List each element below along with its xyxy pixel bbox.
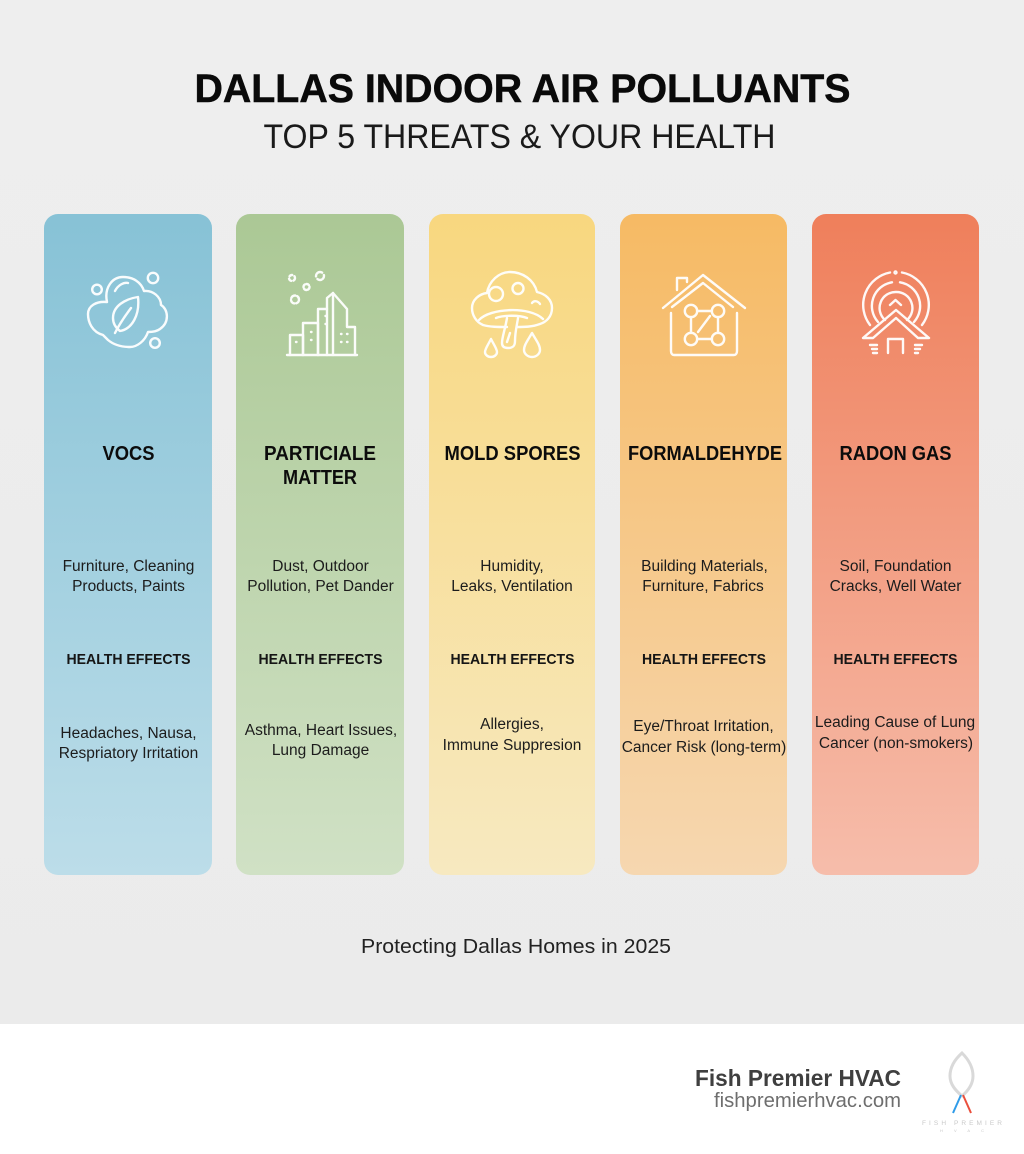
effects — [245, 722, 397, 759]
sources: Humidity, — [480, 558, 544, 575]
icon: house with molecule — [663, 275, 745, 355]
health effects label: HEALTH EFFECTS — [66, 651, 190, 668]
heading: MOLD SPORES — [444, 443, 580, 465]
panel: Radon gas — [812, 214, 979, 875]
effects — [443, 716, 581, 754]
sources: Products, Paints — [72, 578, 185, 595]
title — [194, 67, 850, 156]
logo: Fish Premier: FISH PREMIER — [922, 1120, 1002, 1127]
logo: Fish Premier — [922, 1053, 1002, 1133]
heading: FORMALDEHYDE — [628, 443, 782, 465]
subtitle: TOP 5 THREATS & YOUR HEALTH — [264, 118, 776, 156]
sources: Dust, Outdoor — [272, 558, 369, 575]
sources: Furniture, Cleaning — [63, 558, 194, 575]
heading: VOCS — [102, 443, 154, 465]
footer brand text: fishpremierhvac.com — [714, 1090, 901, 1112]
effects: Cancer (non-smokers) — [819, 735, 973, 752]
health effects label: HEALTH EFFECTS — [642, 651, 766, 668]
health effects label: HEALTH EFFECTS — [834, 651, 958, 668]
effects: Eye/Throat Irritation, — [633, 718, 774, 735]
sources — [830, 558, 961, 595]
icon: city with particles — [287, 272, 357, 355]
effects: Allergies, — [480, 716, 544, 733]
effects: Asthma, Heart Issues, — [245, 722, 397, 739]
heading: PARTICIALE — [264, 443, 376, 465]
effects: Cancer Risk (long-term) — [622, 739, 786, 756]
sources — [247, 558, 394, 595]
icon: house with radon waves — [863, 272, 929, 353]
health effects label: HEALTH EFFECTS — [450, 651, 574, 668]
title: DALLAS INDOOR AIR POLLUANTS — [194, 67, 850, 111]
sources: Furniture, Fabrics — [642, 578, 764, 595]
effects — [59, 725, 198, 762]
panel: Mold spores — [429, 214, 595, 875]
footer brand text: Fish Premier HVAC — [695, 1065, 901, 1091]
sources — [641, 558, 768, 595]
footer brand text — [695, 1065, 901, 1112]
logo: Fish Premier: HVAC — [940, 1128, 984, 1133]
effects — [815, 714, 975, 752]
health effects label: HEALTH EFFECTS — [258, 651, 382, 668]
sources: Pollution, Pet Dander — [247, 578, 394, 595]
sources: Cracks, Well Water — [830, 578, 961, 595]
effects: Leading Cause of Lung — [815, 714, 975, 731]
tagline: Protecting Dallas Homes in 2025 — [361, 935, 671, 958]
sources — [63, 558, 194, 595]
panel: Formaldehyde — [620, 214, 787, 875]
sources: Leaks, Ventilation — [451, 578, 573, 595]
icon: mushroom with drops — [472, 272, 552, 357]
sources: Building Materials, — [641, 558, 768, 575]
icon: cloud with leaf — [88, 273, 167, 348]
heading: RADON GAS — [840, 443, 952, 465]
effects: Lung Damage — [272, 742, 369, 759]
sources: Soil, Foundation — [839, 558, 952, 575]
sources — [451, 558, 573, 595]
effects: Headaches, Nausa, — [60, 725, 197, 742]
effects: Respriatory Irritation — [59, 745, 198, 762]
heading: MATTER — [283, 467, 357, 489]
effects: Immune Suppresion — [443, 737, 581, 754]
heading — [264, 443, 376, 489]
panel: Particulate matter — [236, 214, 404, 875]
effects — [622, 718, 786, 756]
panel: VOCs — [44, 214, 212, 875]
